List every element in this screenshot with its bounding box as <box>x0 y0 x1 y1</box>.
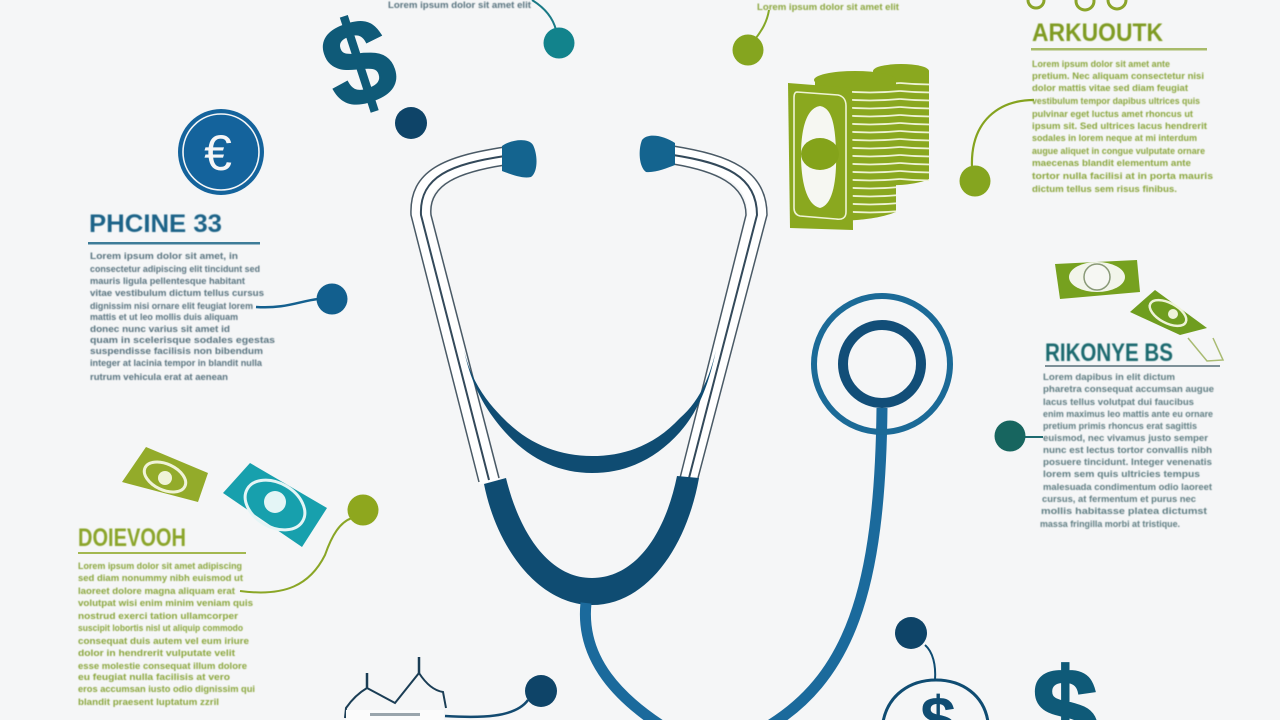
text block <box>1040 372 1214 529</box>
text block: vitae vestibulum dictum tellus cursus <box>90 288 264 298</box>
text block: dolor in hendrerit vulputate velit <box>78 648 235 658</box>
text block: dignissim nisi ornare elit feugiat lorem <box>90 301 253 311</box>
yoke <box>484 476 699 605</box>
text block: suscipit lobortis nisl ut aliquip commodo <box>78 623 243 633</box>
right ear tip <box>640 136 675 172</box>
text block: lacus tellus volutpat dui faucibus <box>1043 397 1194 407</box>
text block: malesuada condimentum odio laoreet <box>1043 482 1212 492</box>
connector green left <box>240 494 378 592</box>
connector navy bottom <box>445 675 557 717</box>
text block: enim maximus leo mattis ante eu ornare <box>1043 409 1213 419</box>
icon: rings <box>1028 0 1126 10</box>
text block: Lorem dapibus in elit dictum <box>1043 372 1175 382</box>
text block: cursus, at fermentum et purus nec <box>1042 494 1196 504</box>
text block: vestibulum tempor dapibus ultrices quis <box>1032 96 1200 106</box>
text block: donec nunc varius sit amet id <box>90 324 230 334</box>
text block: quam in scelerisque sodales egestas <box>90 335 275 345</box>
panel: left top <box>88 210 275 382</box>
icon: green bill right 1 <box>1055 260 1140 299</box>
icon: hospital roofs <box>345 657 446 720</box>
connector teal <box>532 0 574 58</box>
crescent <box>464 350 716 473</box>
icon: green bill right 2 <box>1130 290 1207 335</box>
icon: euro coin <box>178 109 264 195</box>
text block: sed diam nonummy nibh euismod ut <box>78 573 243 583</box>
text block: posuere tincidunt. Integer venenatis <box>1043 457 1212 467</box>
text block: Lorem ipsum dolor sit amet, in <box>90 251 238 261</box>
text block: pretium primis rhoncus erat sagittis <box>1043 421 1197 431</box>
text block: euismod, nec vivamus justo semper <box>1043 433 1209 443</box>
left tube <box>411 147 505 482</box>
icon: coin bottom <box>883 680 988 720</box>
connector blue left <box>256 284 348 314</box>
text block: mattis et ut leo mollis duis aliquam <box>90 312 238 322</box>
left ear tip <box>502 140 537 177</box>
text block: dictum tellus sem risus finibus. <box>1032 184 1177 194</box>
connector green right top <box>960 100 1034 196</box>
text block: Lorem ipsum dolor sit amet adipiscing <box>78 561 242 571</box>
text block: pharetra consequat accumsan augue <box>1043 384 1214 394</box>
text block: mauris ligula pellentesque habitant <box>90 276 245 286</box>
bill corner outline <box>1188 338 1223 361</box>
text block: blandit praesent luptatum zzril <box>78 697 219 707</box>
top caption right: Lorem ipsum dolor sit amet elit <box>757 2 899 12</box>
text block <box>90 251 275 382</box>
heading: ARKUOUTK <box>1032 19 1163 47</box>
top caption left: Lorem ipsum dolor sit amet elit <box>388 0 531 10</box>
connector navy bottom right <box>895 617 935 680</box>
text block: rutrum vehicula erat at aenean <box>90 372 228 382</box>
text block: esse molestie consequat illum dolore <box>78 661 247 671</box>
text block: consectetur adipiscing elit tincidunt sed <box>90 264 260 274</box>
connector teal right <box>994 420 1043 452</box>
text block: consequat duis autem vel eum iriure <box>78 636 249 646</box>
text block: laoreet dolore magna aliquam erat <box>78 586 235 596</box>
chest piece <box>814 296 950 432</box>
icon: teal bill <box>223 463 327 547</box>
stethoscope <box>411 136 950 720</box>
text block: integer at lacinia tempor in blandit nulla <box>90 358 263 368</box>
icon: euro coin: € <box>204 125 232 181</box>
text block: sodales in lorem neque at mi interdum <box>1032 133 1197 143</box>
text block: lorem sem quis ultricies tempus <box>1043 469 1200 479</box>
text block: pretium. Nec aliquam consectetur nisi <box>1032 71 1204 81</box>
icon: green bill left <box>122 447 208 502</box>
text block: pulvinar eget luctus amet rhoncus ut <box>1032 109 1193 119</box>
text block: volutpat wisi enim minim veniam quis <box>78 598 253 608</box>
text block: nostrud exerci tation ullamcorper <box>78 611 239 621</box>
heading: PHCINE 33 <box>89 210 222 238</box>
panel: right top <box>1028 0 1213 194</box>
connector green top <box>732 10 769 66</box>
text block: eros accumsan iusto odio dignissim qui <box>78 684 255 694</box>
heading: DOIEVOOH <box>78 524 186 552</box>
text block <box>78 561 255 707</box>
dot navy <box>395 107 427 139</box>
text block: ipsum sit. Sed ultrices lacus hendrerit <box>1032 121 1207 131</box>
text block: eu feugiat nulla facilisis at vero <box>78 672 231 682</box>
text block: tortor nulla facilisi at in porta mauris <box>1032 171 1213 181</box>
text block: mollis habitasse platea dictumst <box>1041 506 1207 516</box>
text block: maecenas blandit elementum ante <box>1032 158 1191 168</box>
panel: left bottom <box>78 524 255 707</box>
right tube <box>673 146 767 480</box>
icon: cash stack <box>788 64 929 230</box>
text block: augue aliquet in congue vulputate ornare <box>1032 146 1205 156</box>
text block <box>1032 59 1213 194</box>
text block: Lorem ipsum dolor sit amet ante <box>1032 59 1170 69</box>
text block: dolor mattis vitae sed diam feugiat <box>1032 83 1188 93</box>
text block: massa fringilla morbi at tristique. <box>1040 519 1180 529</box>
heading: RIKONYE BS <box>1045 339 1173 367</box>
blue tube <box>585 408 882 720</box>
text block: nunc est lectus tortor convallis nibh <box>1043 445 1212 455</box>
text block: suspendisse facilisis non bibendum <box>90 346 263 356</box>
panel: right middle <box>1040 339 1220 529</box>
